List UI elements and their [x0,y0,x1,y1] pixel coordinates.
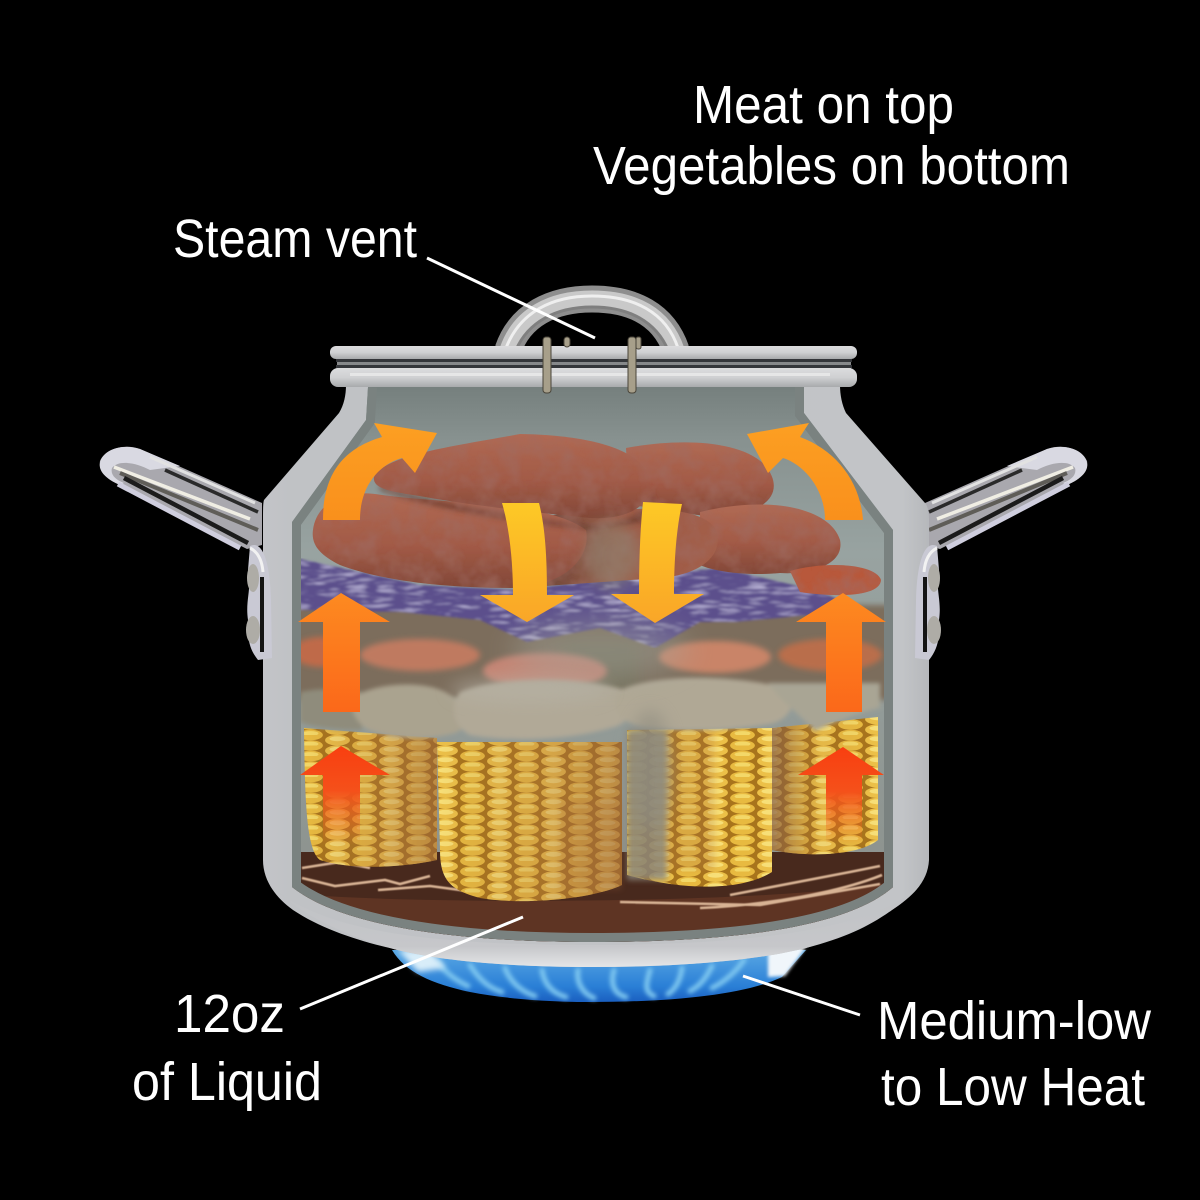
burner flame [392,947,806,1002]
heading: meat on top: Meat on top [693,75,954,135]
label: to low heat: to Low Heat [881,1057,1145,1117]
label: of liquid: of Liquid [132,1052,322,1112]
label: 12oz: 12oz [174,984,285,1044]
heading: vegetables on bottom: Vegetables on bottom [593,136,1070,196]
label: steam vent: Steam vent [173,209,417,269]
corn cob 2 [437,742,622,901]
right handle bracket [915,545,941,660]
left up arrow [298,593,390,712]
left lower up arrow [300,746,390,845]
lid [330,337,857,393]
white hot edge [768,947,806,977]
corn cob 4 [772,717,878,854]
left curved arrow [323,423,437,520]
leader line: liquid [300,917,523,1009]
sausage lower left [313,493,587,588]
interior of the pot [285,380,900,955]
sausage back right [626,442,774,516]
right lower up arrow [798,747,884,845]
smoked sausage end [790,565,881,595]
potato layer [300,678,880,739]
bright flame tips [438,960,744,998]
sausage top shadow [380,485,655,530]
left down arrow [480,503,574,622]
liquid and rack [292,852,893,942]
corn cob 1 [304,728,437,867]
sausage middle [545,509,718,586]
left handle arm [100,447,262,549]
corn cob 3 [627,728,772,887]
right handle arm [925,447,1087,549]
right down arrow [611,502,704,623]
leader line: steam vent [427,258,595,338]
sausage top [374,434,650,518]
right curved arrow [747,423,863,520]
carrot layer [290,605,900,700]
pot body [263,380,929,967]
sausage lower right [700,505,840,574]
leader line: heat [743,976,860,1015]
label: medium-low: Medium-low [877,991,1152,1051]
cabbage layer [296,558,840,648]
right up arrow [796,593,886,712]
left handle bracket [246,545,272,660]
lid clips [543,337,641,393]
inner wall shadow band [292,387,893,942]
steam [450,521,690,830]
lid handle [506,296,678,350]
infographic canvas [100,86,1152,1111]
sausage stack [313,434,881,595]
